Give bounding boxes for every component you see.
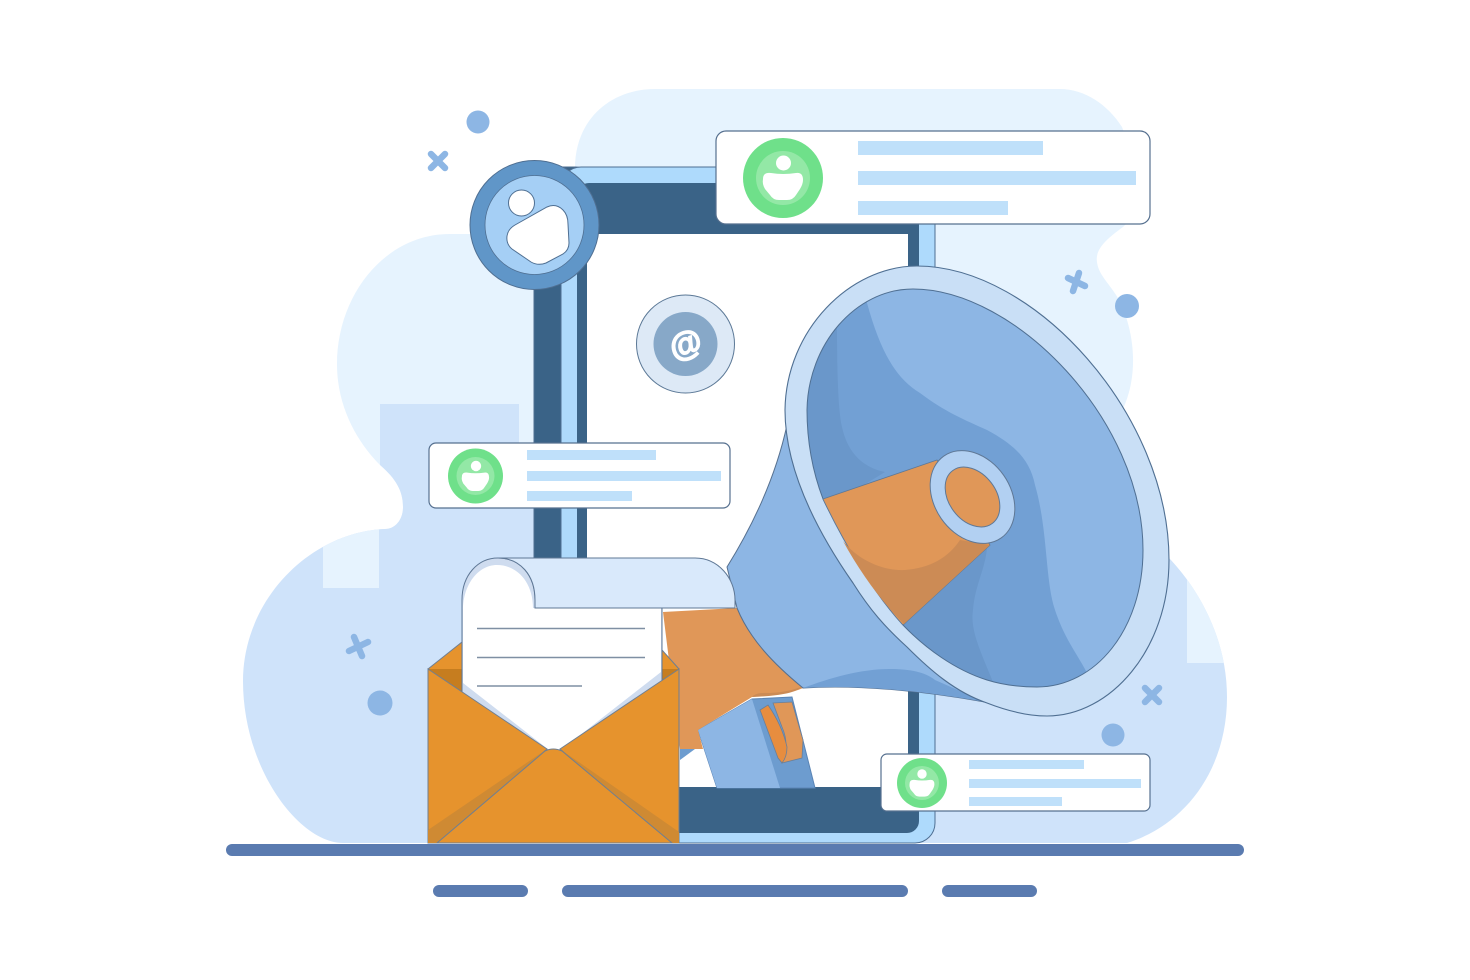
email symbol badge <box>636 295 734 393</box>
letter fold <box>498 558 735 608</box>
small blue edge under neck <box>680 749 695 760</box>
envelope left panel <box>428 669 547 843</box>
horn rim <box>785 266 1169 716</box>
sound cone shadow <box>843 540 990 624</box>
lower dash left <box>433 885 528 897</box>
megaphone neck <box>663 608 803 749</box>
envelope bottom flap <box>437 749 672 843</box>
profile badge <box>470 160 599 290</box>
envelope flap shadows <box>428 749 679 843</box>
lower dash right <box>942 885 1037 897</box>
lower dash centre <box>562 885 908 897</box>
email symbol badge: @ <box>664 321 706 366</box>
letter body <box>462 558 662 765</box>
neck shadow band <box>752 686 803 697</box>
ground line <box>226 844 1244 856</box>
middle notification card <box>429 443 730 508</box>
megaphone horn body <box>727 425 1000 702</box>
background blob: left light cloud <box>337 234 534 530</box>
decorative dots and crosses <box>349 110 1159 746</box>
background building: darker block <box>380 404 534 540</box>
horn interior <box>800 280 1150 695</box>
megaphone handle <box>698 697 815 788</box>
bottom notification card <box>881 754 1150 811</box>
top notification card <box>716 131 1150 224</box>
horn interior outline <box>807 289 1143 687</box>
envelope back <box>428 642 679 700</box>
speaker core <box>934 457 1011 537</box>
background blob: lower darker cloud <box>243 500 1227 843</box>
phone <box>534 167 935 843</box>
envelope with letter <box>428 558 735 843</box>
envelope right panel <box>560 669 679 843</box>
megaphone <box>663 266 1169 788</box>
horn lower shading <box>803 669 985 702</box>
letter lines <box>477 628 645 686</box>
background blob: upper light cloud <box>575 89 1150 700</box>
sound cone <box>823 460 990 625</box>
letter white face <box>463 565 661 750</box>
speaker ring <box>913 434 1032 560</box>
background buildings: lighter blocks <box>323 525 1232 663</box>
